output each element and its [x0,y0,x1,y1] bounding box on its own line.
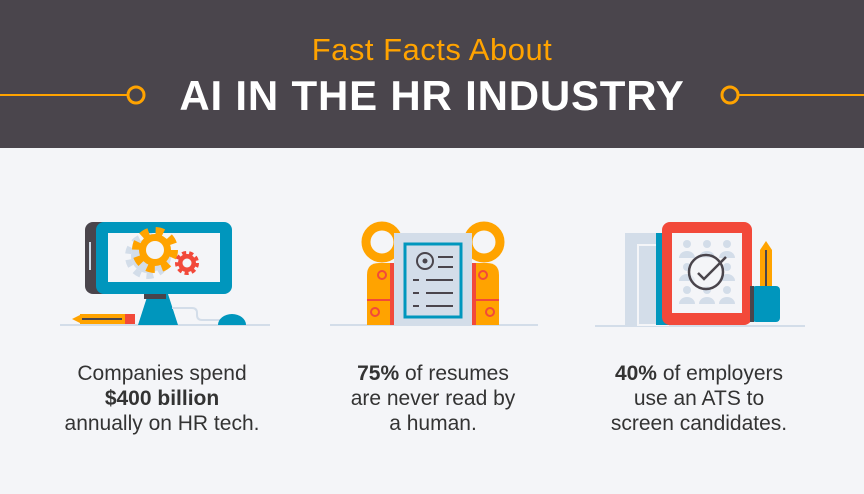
caption 2 [351,362,516,435]
icon: clipboard with checkmark [595,222,805,327]
header [0,0,864,148]
caption 3 [611,362,787,435]
caption 1: annually on HR tech. [65,412,259,435]
caption 2: 75% of resumes [357,362,509,385]
caption 3: use an ATS to [634,387,764,410]
icon: computer with gears [60,222,270,326]
caption 1 [65,362,259,435]
title line 2: AI IN THE HR INDUSTRY [179,72,685,119]
caption 3: 40% of employers [615,362,783,385]
caption 1: $400 billion [105,387,219,410]
decorative connector lines [0,86,864,104]
caption 3: screen candidates. [611,412,787,435]
caption 2: are never read by [351,387,515,410]
icon: robot arms holding resume [330,222,538,326]
caption 1: Companies spend [77,362,247,385]
caption 2: a human. [389,412,477,435]
title line 1: Fast Facts About [312,32,552,67]
